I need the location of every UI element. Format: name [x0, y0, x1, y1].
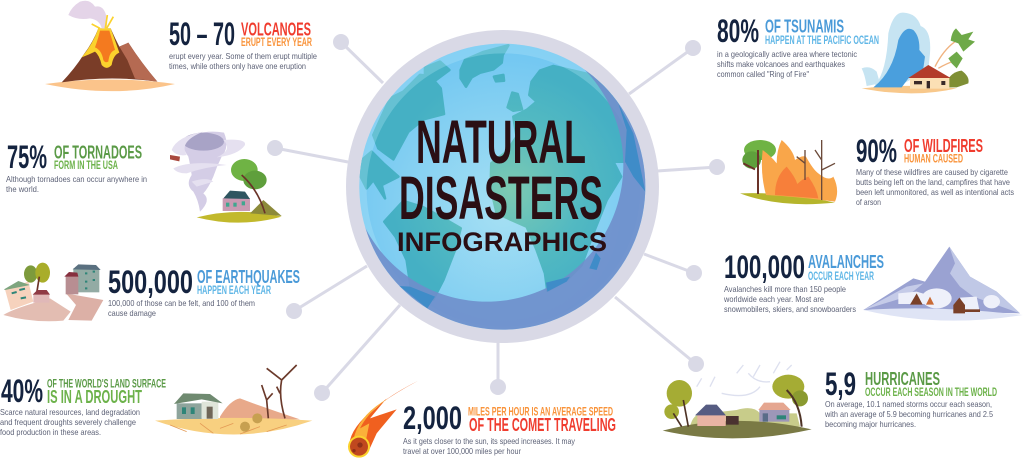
- text: tsunamis: common called "Ring of Fire": [717, 69, 809, 79]
- stat: 2,000: 2,000: [403, 400, 462, 436]
- text: earthquakes: 100,000 of those can be felt, and 100 of them: [108, 298, 255, 308]
- heading: avalanches: OCCUR EACH YEAR: [808, 269, 874, 283]
- heading: tornadoes: FORM IN THE USA: [54, 158, 118, 172]
- stat: 100,000: 100,000: [724, 249, 805, 285]
- heading: drought: [47, 376, 166, 407]
- icon: hurricane: [663, 362, 812, 438]
- text: hurricanes: On average, 10.1 named storms occur each season,: [825, 399, 992, 409]
- title: INFOGRAPHICS: [397, 227, 607, 257]
- stat: 40%: 40%: [1, 373, 43, 409]
- text: volcanoes: times, while others only have one eruption: [169, 61, 306, 71]
- heading: earthquakes: OF EARTHQUAKES: [197, 267, 300, 287]
- text: tsunamis: shifts make volcanoes and earthquakes: [717, 59, 845, 69]
- icon: tsunami: [862, 13, 975, 93]
- panel: tsunamis: [717, 13, 975, 93]
- title: [397, 108, 607, 257]
- heading: comet: [468, 404, 616, 435]
- text: comet: [403, 436, 576, 456]
- heading: tornadoes: OF TORNADOES: [54, 142, 142, 162]
- text: avalanches: worldwide each year. Most are: [723, 294, 824, 304]
- heading: tsunamis: [765, 16, 879, 47]
- stat: 50 – 70: 50 – 70: [169, 16, 235, 52]
- text: volcanoes: erupt every year. Some of them erupt multiple: [169, 51, 317, 61]
- shaded land: [399, 103, 645, 308]
- heading: wildfires: [904, 136, 983, 166]
- text: volcanoes: [169, 51, 317, 71]
- text: wildfires: Many of these wildfires are caused by cigarette: [856, 167, 1008, 177]
- text: avalanches: [723, 284, 856, 314]
- text: drought: food production in these areas.: [0, 427, 101, 437]
- heading: tsunamis: OF TSUNAMIS: [765, 16, 844, 36]
- heading: earthquakes: HAPPEN EACH YEAR: [197, 283, 271, 297]
- text: tsunamis: in a geologically active area where tectonic: [717, 49, 857, 59]
- heading: comet: MILES PER HOUR IS AN AVERAGE SPEED: [468, 404, 613, 418]
- icon: avalanche: [863, 247, 1023, 321]
- text: hurricanes: [824, 399, 993, 429]
- heading: volcanoes: ERUPT EVERY YEAR: [241, 35, 312, 49]
- text: drought: and frequent droughts severely challenge: [0, 417, 136, 427]
- title: DISASTERS: [399, 164, 603, 232]
- heading: avalanches: [808, 252, 884, 283]
- title: NATURAL: [416, 108, 586, 176]
- heading: wildfires: HUMAN CAUSED: [904, 152, 963, 166]
- text: tornadoes: [6, 174, 147, 194]
- heading: hurricanes: HURRICANES: [865, 369, 940, 389]
- text: wildfires: [856, 167, 1014, 207]
- icon: drought: [155, 365, 312, 434]
- heading: drought: OF THE WORLD'S LAND SURFACE: [47, 376, 166, 390]
- lower right shaded band: [365, 70, 646, 330]
- heading: hurricanes: [865, 369, 997, 399]
- icon: comet: [348, 381, 418, 458]
- upper left light band: [360, 44, 608, 252]
- text: hurricanes: with an average of 5.9 becoming hurricanes and 2.5: [824, 409, 993, 419]
- panel: earthquakes: [3, 263, 300, 321]
- text: tornadoes: the world.: [6, 184, 39, 194]
- text: drought: [0, 407, 140, 437]
- heading: volcanoes: VOLCANOES: [241, 20, 311, 40]
- icon: wildfire: [740, 140, 837, 204]
- stat: 80%: 80%: [717, 13, 759, 49]
- heading: tsunamis: HAPPEN AT THE PACIFIC OCEAN: [765, 33, 879, 47]
- heading: volcanoes: [241, 20, 312, 49]
- heading: avalanches: AVALANCHES: [808, 252, 884, 272]
- text: avalanches: snowmobilers, skiers, and snowboarders: [724, 304, 856, 314]
- panel: avalanches: [723, 247, 1023, 321]
- icon: earthquake: [3, 263, 103, 321]
- stat: 75%: 75%: [7, 139, 47, 175]
- heading: drought: IS IN A DROUGHT: [47, 387, 142, 407]
- panel: volcanoes: [45, 1, 317, 91]
- connector lines and nodes: [267, 34, 725, 401]
- panel: comet: [348, 381, 616, 458]
- land masses: [361, 45, 625, 299]
- text: tsunamis: [717, 49, 857, 79]
- globe: [346, 30, 659, 343]
- stat: 5,9: 5,9: [825, 366, 856, 402]
- text: hurricanes: becoming major hurricanes.: [825, 419, 916, 429]
- panel: tornadoes: [6, 132, 282, 223]
- text: avalanches: Avalanches kill more than 150 people: [724, 284, 846, 294]
- heading: tornadoes: [54, 142, 142, 172]
- heading: earthquakes: [197, 267, 300, 297]
- text: earthquakes: cause damage: [108, 308, 156, 318]
- stat: 500,000: 500,000: [108, 264, 193, 300]
- text: comet: travel at over 100,000 miles per hour: [403, 446, 521, 456]
- panel: wildfires: [740, 133, 1014, 207]
- icon: volcano: [45, 1, 175, 91]
- text: drought: Scarce natural resources, land degradation: [0, 407, 140, 417]
- panel: hurricanes: [663, 362, 997, 438]
- text: comet: As it gets closer to the sun, its speed increases. It may: [403, 436, 576, 446]
- text: tornadoes: Although tornadoes can occur anywhere in: [6, 174, 147, 184]
- icon: tornado: [170, 132, 282, 223]
- heading: comet: OF THE COMET TRAVELING: [469, 415, 616, 435]
- text: earthquakes: [108, 298, 255, 318]
- stat: 90%: 90%: [856, 133, 897, 169]
- text: wildfires: of arson: [856, 197, 881, 207]
- panel: drought: [0, 365, 312, 437]
